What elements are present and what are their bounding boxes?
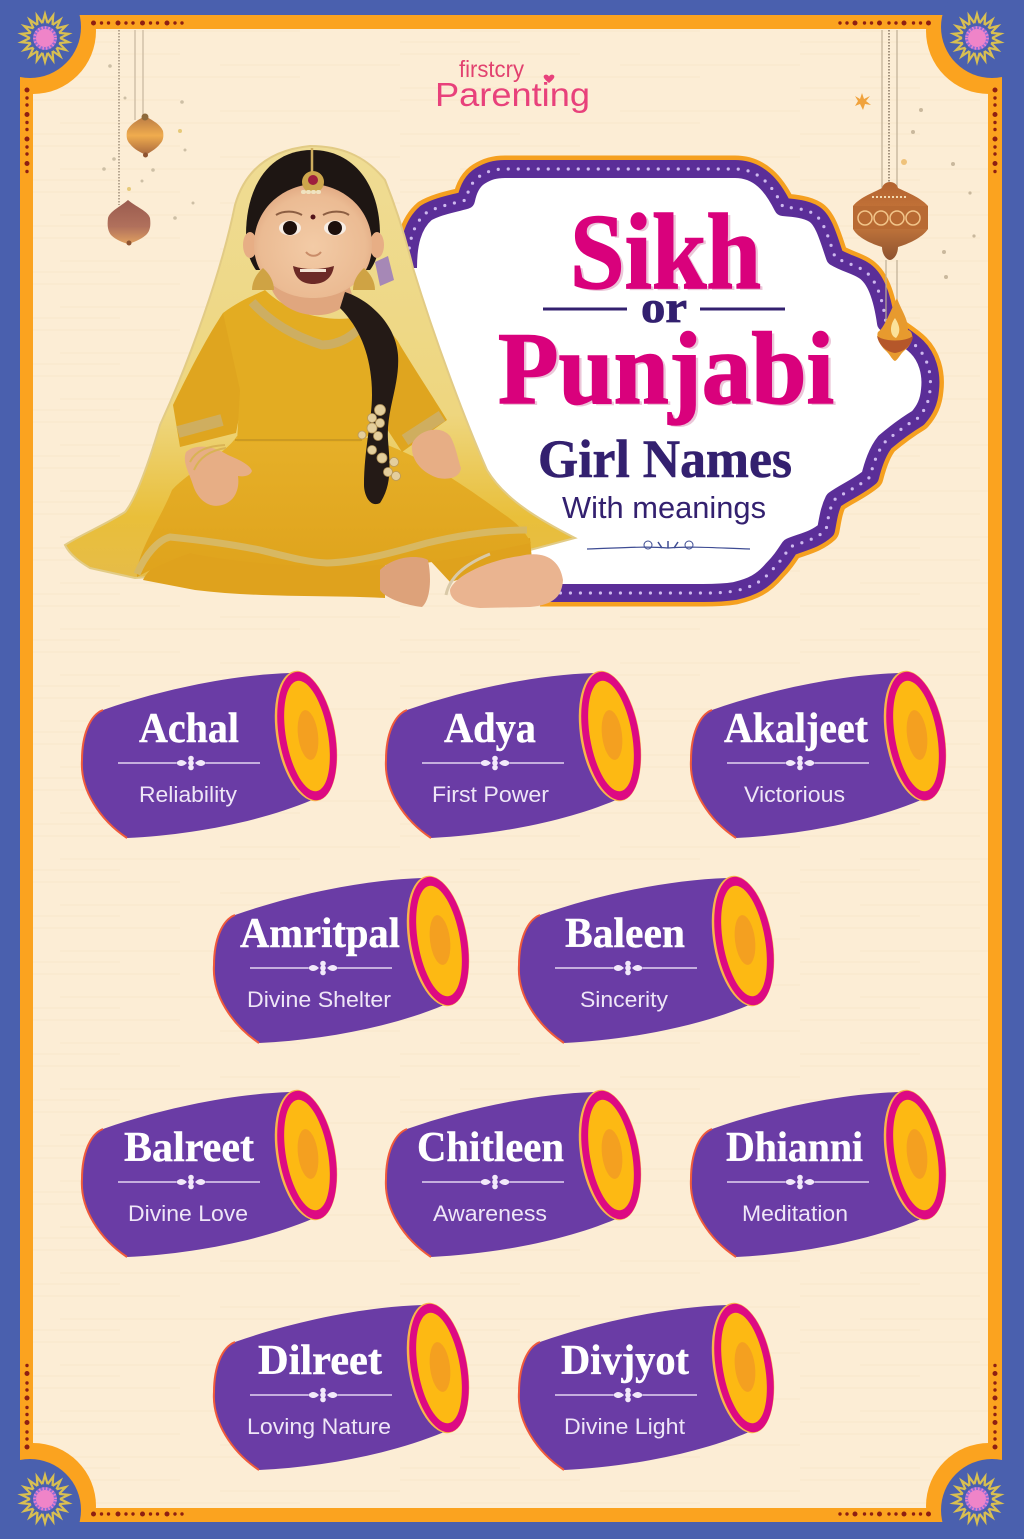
logo: firstcry: firstcry: [459, 56, 524, 82]
name card: Adya: [386, 666, 651, 838]
trousers: [143, 538, 532, 598]
hair clip behind veil: [375, 256, 394, 286]
hair: [246, 150, 380, 270]
eyes: [279, 220, 346, 236]
title: Punjabi: Punjabi: [501, 314, 837, 428]
skirt: [137, 436, 531, 577]
bindi: [310, 214, 316, 220]
name card: Achal: [82, 666, 347, 838]
face: [254, 184, 372, 298]
cuffs: [178, 416, 442, 440]
name: Balreet: [124, 1125, 254, 1171]
eyebrows: [276, 212, 349, 215]
veil: [65, 146, 575, 578]
name card: Baleen: [519, 871, 784, 1043]
name card: Dilreet: [214, 1298, 479, 1470]
meaning: Divine Shelter: [247, 987, 391, 1012]
meaning: Loving Nature: [247, 1414, 391, 1439]
meaning: Divine Light: [564, 1414, 685, 1439]
meaning: Awareness: [433, 1201, 547, 1226]
bangles: [190, 445, 226, 470]
corner ornament: top right: [832, 0, 1024, 172]
logo: [435, 56, 590, 113]
name: Divjyot: [561, 1338, 689, 1384]
nose: [306, 252, 321, 256]
left arm sleeve: [173, 313, 252, 447]
big foot: [450, 554, 563, 608]
name: Chitleen: [417, 1125, 564, 1171]
logo: heart: [544, 75, 554, 83]
small foot: [380, 557, 430, 607]
meaning: Meditation: [742, 1201, 848, 1226]
name: Achal: [139, 706, 239, 752]
skirt hem: [137, 530, 527, 574]
diya: [877, 298, 912, 361]
name card: Balreet: [82, 1085, 347, 1257]
name card: Divjyot: [519, 1298, 784, 1470]
hanging lanterns: right: [853, 30, 976, 361]
name card: Amritpal: [214, 871, 479, 1043]
right arm sleeve: [368, 340, 447, 452]
meaning: Sincerity: [580, 987, 668, 1012]
plaque outer orange edge: [408, 169, 930, 593]
name: Adya: [444, 706, 536, 752]
name: Amritpal: [240, 911, 400, 957]
name: Dhianni: [726, 1125, 863, 1171]
meaning: Reliability: [139, 782, 237, 807]
flourish: [587, 541, 750, 549]
bodice: [223, 290, 400, 442]
tikka: [302, 148, 324, 193]
name card: Dhianni: [691, 1085, 956, 1257]
left hand: [185, 447, 252, 506]
star: [855, 93, 871, 110]
subtitle: With meanings: With meanings: [562, 490, 766, 525]
hanging lanterns: left: [102, 30, 194, 246]
braid pearls: [358, 404, 400, 480]
title: Sikh: Sikh: [573, 195, 764, 314]
lantern body: [853, 182, 928, 260]
earrings: [252, 268, 375, 290]
right hand: [412, 430, 461, 479]
meaning: Divine Love: [128, 1201, 248, 1226]
braid: [340, 292, 398, 504]
corner ornament: top left: [0, 0, 190, 172]
neck: [272, 270, 352, 315]
plaque scalloped band: [408, 169, 930, 593]
illustration: seated girl in yellow suit: [65, 146, 575, 608]
title: Sikh: Sikh: [570, 193, 761, 312]
meaning: Victorious: [744, 782, 845, 807]
name card: Akaljeet: [691, 666, 956, 838]
waist seam: [235, 439, 362, 441]
name: Dilreet: [258, 1338, 382, 1384]
smile: [293, 266, 334, 284]
corner ornament: bottom left: [0, 1365, 190, 1539]
title: or: or: [641, 283, 687, 332]
anklet: [446, 554, 490, 595]
meaning: First Power: [432, 782, 549, 807]
title: Punjabi: Punjabi: [498, 312, 834, 426]
neckline embroidery: [252, 302, 365, 345]
plaque white fill: [390, 169, 930, 593]
title plaque: [390, 169, 930, 593]
logo: Parenting: Parenting: [435, 76, 590, 113]
name: Baleen: [565, 911, 685, 957]
plaque dots: [408, 169, 930, 593]
name card: Chitleen: [386, 1085, 651, 1257]
corner ornament: bottom right: [832, 1365, 1024, 1539]
name: Akaljeet: [724, 706, 868, 752]
ears: [243, 232, 384, 258]
title: Girl Names: Girl Names: [538, 429, 792, 489]
